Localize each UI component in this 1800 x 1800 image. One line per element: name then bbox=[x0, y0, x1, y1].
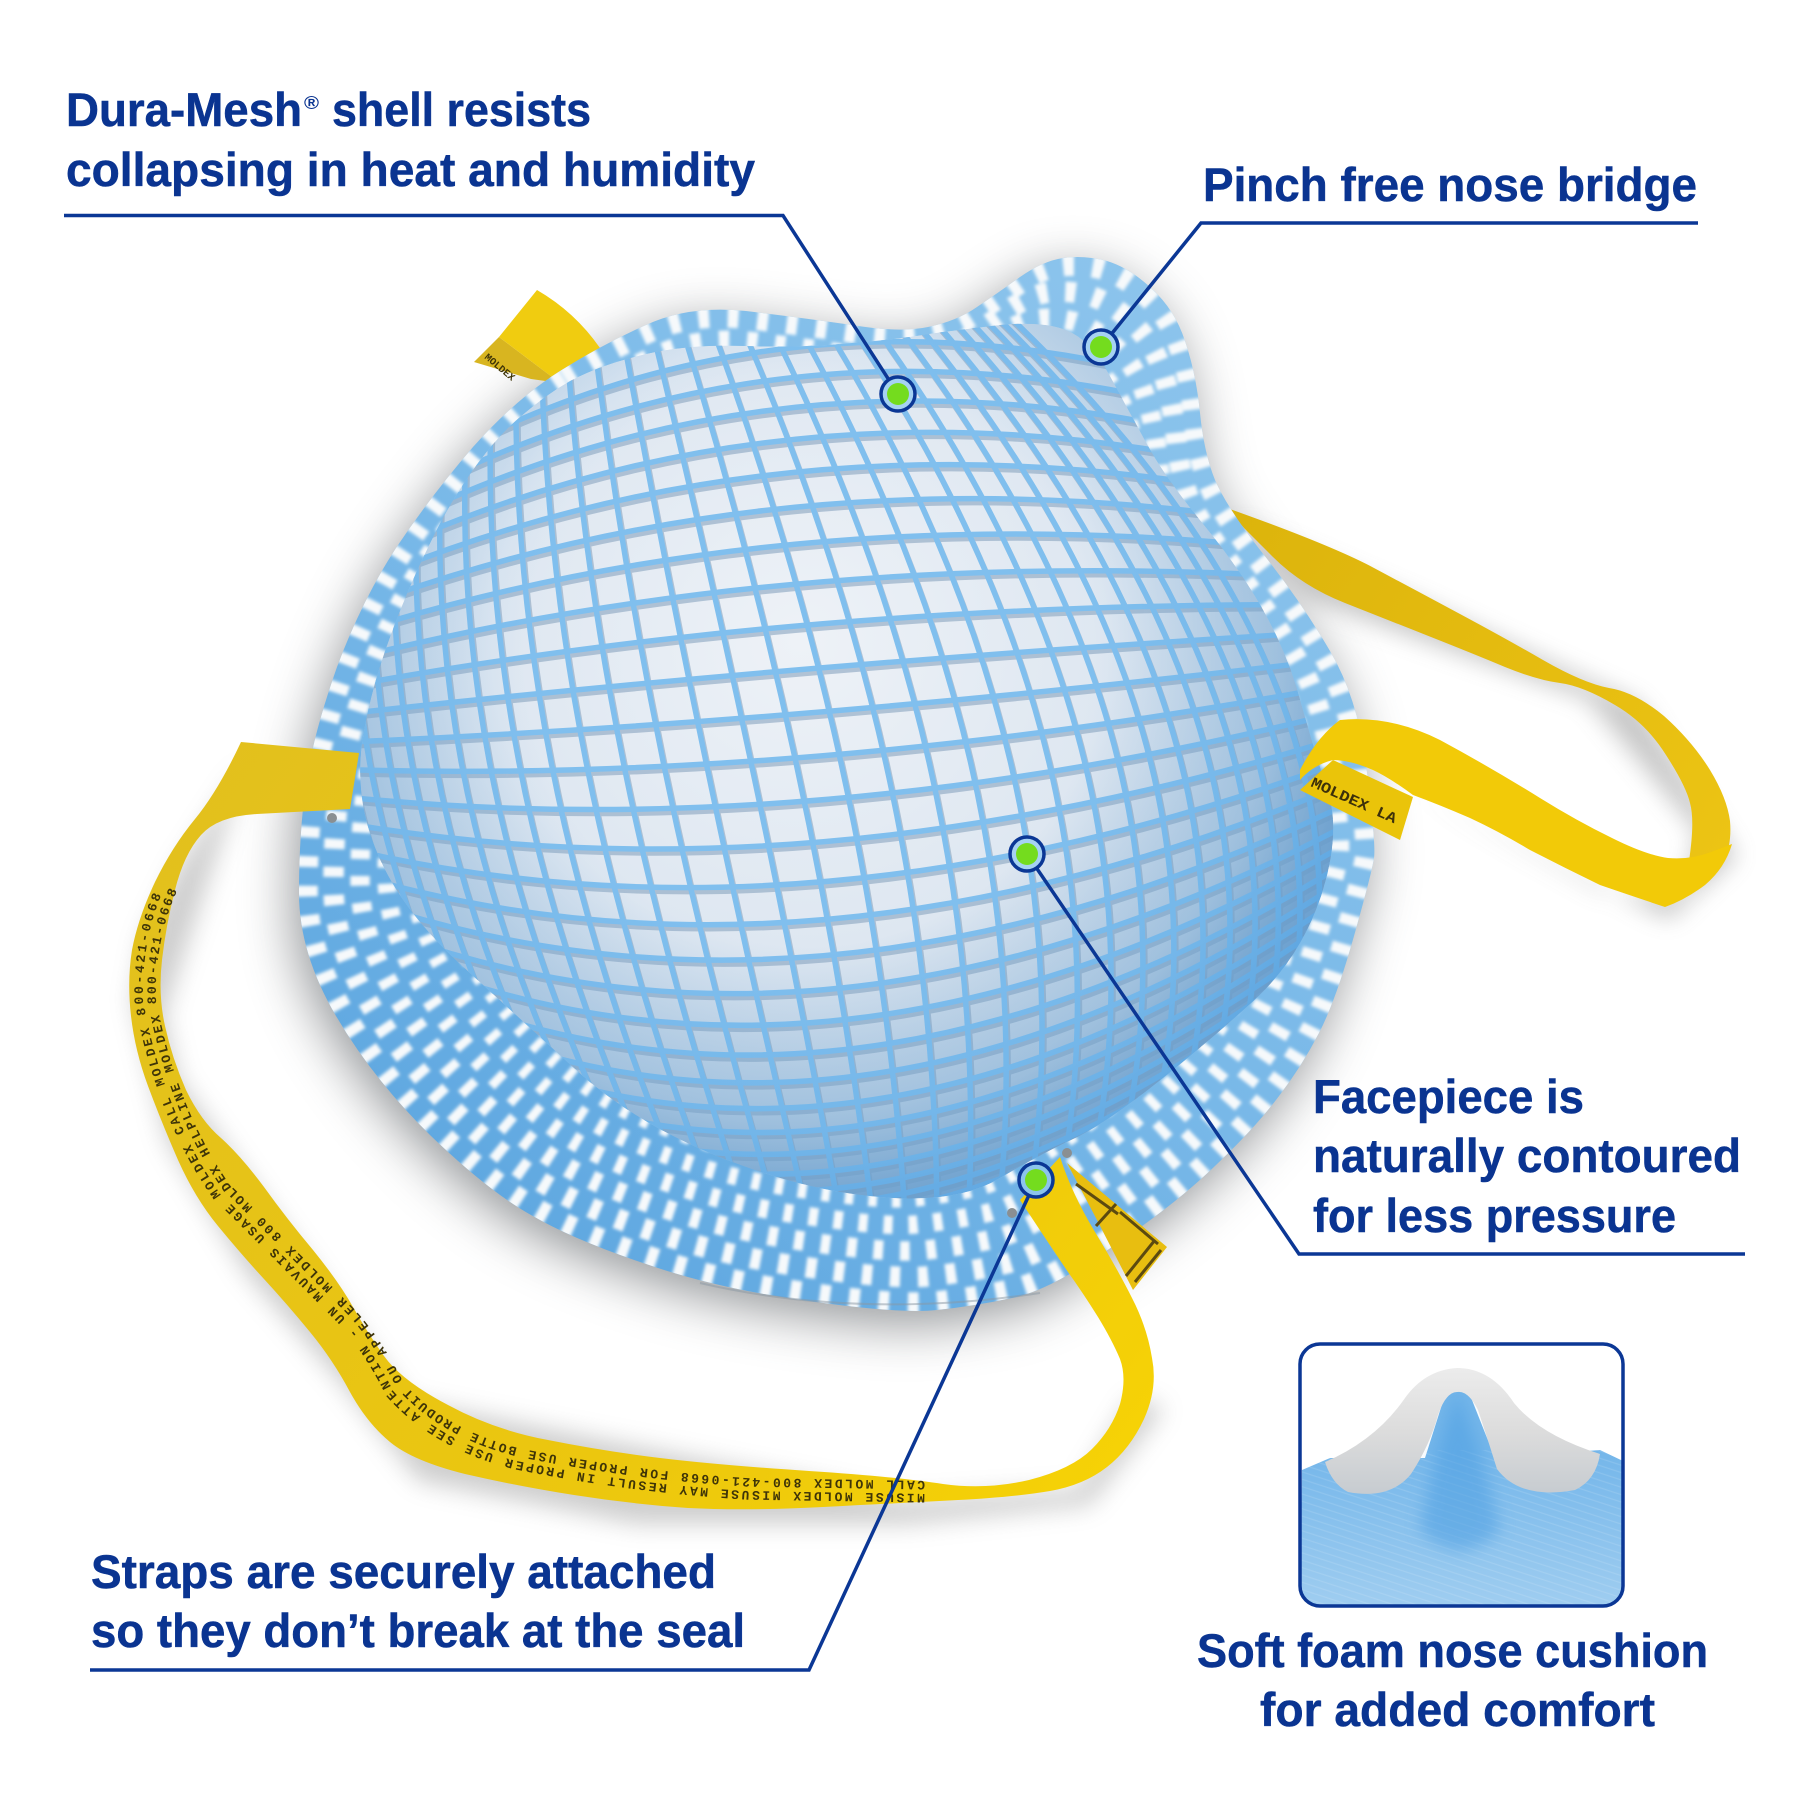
strap: long left and bottom band bbox=[129, 742, 1154, 1510]
lower rim edge line bbox=[700, 1283, 1040, 1304]
callout: facepiece bbox=[1010, 837, 1745, 1254]
heading: Dura-Mesh bbox=[66, 83, 302, 136]
heading: collapsing in heat and humidity bbox=[66, 143, 755, 196]
strap: bottom tag behind band bbox=[1067, 1163, 1167, 1290]
respirator mask body bbox=[299, 257, 1382, 1334]
leader line bbox=[1027, 854, 1745, 1254]
caption: foam nose cushion: for added comfort bbox=[1260, 1683, 1655, 1736]
heading bbox=[91, 1545, 745, 1657]
strap: top left tab bbox=[474, 290, 600, 384]
panel border bbox=[1300, 1344, 1623, 1606]
heading bbox=[1313, 1070, 1741, 1242]
marker dot bbox=[1019, 1163, 1053, 1197]
callout: Dura-Mesh shell bbox=[64, 83, 915, 411]
strap: long left and bottom band: CALL MOLDEX 800-421-0668 FOR PROPER USE BOTTE PRODUIT OU APPELER MOLDEX 800 MOLDEX HELPLINE MOLDEX 800-421-0668 bbox=[147, 888, 925, 1490]
nose fold bbox=[1420, 1390, 1500, 1550]
strap: right front band with tab bbox=[1300, 719, 1732, 907]
foam cushion bbox=[1325, 1368, 1600, 1494]
marker dot bbox=[881, 377, 915, 411]
callout: nose bridge bbox=[1084, 158, 1698, 364]
strap pins bbox=[327, 813, 1072, 1218]
heading: Straps are securely attached bbox=[91, 1545, 716, 1598]
panel: foam nose cushion bbox=[1300, 1344, 1625, 1608]
heading: Pinch free nose bridge bbox=[1203, 158, 1697, 211]
printed tab text: MOLDEX LA bbox=[1308, 775, 1399, 828]
heading: shell resists bbox=[332, 83, 591, 136]
heading: Facepiece is bbox=[1313, 1070, 1584, 1123]
marker dot bbox=[1084, 330, 1118, 364]
printed strap text: MISUSE MOLDEX MISUSE MAY RESULT IN PROPER USE SEE ATTENTION - UN MAUVAIS USAGE MOLDEX CALL MOLDEX 800-421-0668 bbox=[134, 893, 924, 1502]
heading: for less pressure bbox=[1313, 1189, 1676, 1242]
mesh over filter media bbox=[360, 324, 1333, 1198]
callout: straps bbox=[90, 1163, 1053, 1670]
caption: foam nose cushion: Soft foam nose cushion bbox=[1197, 1624, 1708, 1677]
mask rim bbox=[299, 257, 1374, 1311]
leader line bbox=[1101, 223, 1698, 347]
caption: foam nose cushion bbox=[1197, 1624, 1708, 1736]
fabric knit texture bbox=[1300, 1450, 1623, 1608]
rim perforation holes bbox=[307, 265, 1366, 1303]
inner mask fabric bbox=[1300, 1380, 1625, 1608]
leader line bbox=[90, 1180, 1036, 1670]
leader line bbox=[64, 216, 898, 394]
heading: ® bbox=[304, 93, 319, 113]
tab print: MOLDEX bbox=[481, 353, 516, 384]
strap: back right band and loop bbox=[1227, 508, 1730, 875]
heading: naturally contoured bbox=[1313, 1129, 1741, 1182]
soft shadow under mask and straps bbox=[133, 271, 1736, 1524]
heading bbox=[66, 83, 755, 196]
heading: so they don’t break at the seal bbox=[91, 1604, 745, 1657]
marker dot bbox=[1010, 837, 1044, 871]
